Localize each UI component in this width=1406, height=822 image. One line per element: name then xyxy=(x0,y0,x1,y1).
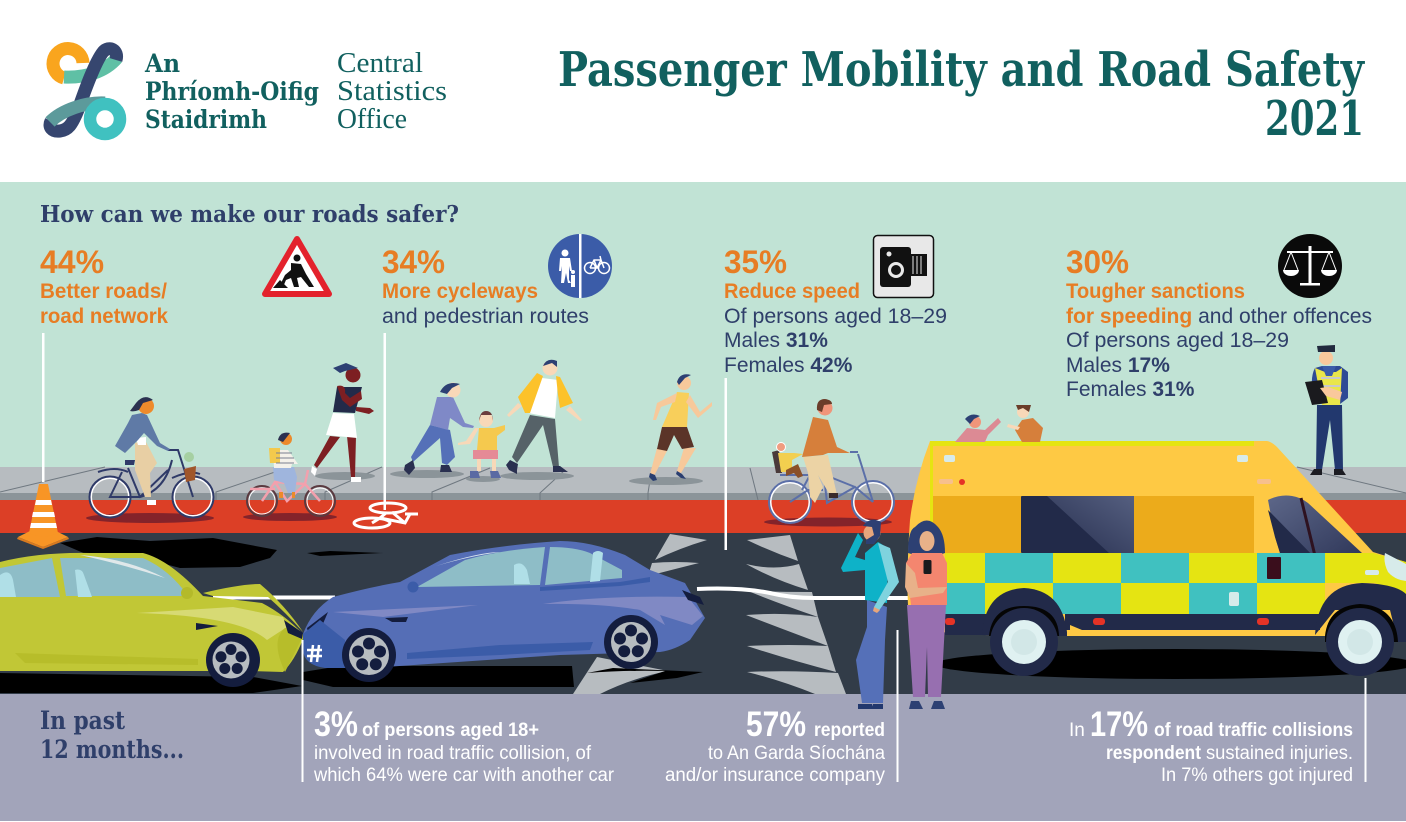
title: 2021 xyxy=(1265,91,1364,147)
stat: 30% tougher sanctions: Tougher sanctions xyxy=(1066,280,1245,303)
icon: speed camera sign xyxy=(874,236,934,298)
stat: 34% more cycleways: More cycleways xyxy=(382,280,538,303)
logo text: English name: Central xyxy=(337,47,423,79)
stat: 57% reported: 57% xyxy=(746,705,806,744)
stat: 35% reduce speed: Reduce speed xyxy=(724,280,860,303)
stat: 44% better roads: 44% xyxy=(40,244,104,280)
stat: 44% better roads: Better roads/ xyxy=(40,280,167,303)
stat: 35% reduce speed xyxy=(724,244,947,377)
stat: 30% tougher sanctions: Males 17% xyxy=(1066,354,1170,377)
car: yellow-green xyxy=(0,553,303,687)
stat: 17% injuries: respondent xyxy=(1106,743,1202,764)
title xyxy=(558,42,1366,147)
car: blue xyxy=(303,541,705,682)
person: cyclist with child seat xyxy=(764,399,894,526)
stat: 3% involved in collision xyxy=(313,705,615,786)
logo text: English name: Statistics xyxy=(337,75,447,107)
stat: 3% involved in collision: involved in road traffic collision, of xyxy=(314,743,592,764)
stat: 34% more cycleways xyxy=(382,244,589,328)
stat: 34% more cycleways: and pedestrian routes xyxy=(382,305,589,328)
stat: 35% reduce speed: Of persons aged 18–29 xyxy=(724,305,947,328)
stat: 57% reported: reported xyxy=(814,720,885,741)
cone xyxy=(17,484,69,549)
heading: in past 12 months: 12 months... xyxy=(40,735,184,764)
person: male runner xyxy=(629,374,712,485)
person: man in yellow jacket xyxy=(500,360,582,480)
logo text: Irish name: Phríomh-Oifig xyxy=(145,77,319,106)
person: child on pink bike xyxy=(243,433,337,521)
leader lines xyxy=(42,333,1366,782)
person: woman in purple top xyxy=(390,382,474,478)
cycle lane symbol xyxy=(354,503,418,528)
person: cyclist with basket xyxy=(86,397,214,523)
stat: 17% injuries: of road traffic collisions xyxy=(1154,720,1353,741)
logo text: Irish name xyxy=(144,49,319,134)
stat: 57% reported xyxy=(665,705,885,786)
crash shadows xyxy=(0,537,703,693)
logo text: English name: Office xyxy=(337,103,407,135)
stat: 57% reported: to An Garda Síochána xyxy=(708,743,885,764)
van: ambulance xyxy=(908,441,1406,679)
stat: 35% reduce speed: Females 42% xyxy=(724,354,853,377)
stat: 35% reduce speed: 35% xyxy=(724,244,787,280)
road markings: crossing xyxy=(573,534,846,694)
stat: 57% reported: and/or insurance company xyxy=(665,765,885,786)
stat: 44% better roads xyxy=(40,244,168,328)
person: woman jogging xyxy=(311,363,375,482)
stat: 17% injuries: 17% xyxy=(1090,705,1148,744)
stat: 44% better roads: road network xyxy=(40,305,168,328)
stat: 30% tougher sanctions: for speeding and other offences xyxy=(1066,305,1372,328)
person: child on skates xyxy=(458,411,505,482)
stat: 17% injuries xyxy=(1069,705,1353,786)
person: man on phone xyxy=(841,520,899,709)
icon: road works sign xyxy=(265,239,329,294)
heading: in past 12 months: In past xyxy=(40,706,125,735)
logo: CSO symbol xyxy=(50,49,120,134)
stat: 3% involved in collision: which 64% were car with another car xyxy=(313,765,615,786)
lane line xyxy=(213,588,912,598)
logo text: Irish name: Staidrimh xyxy=(145,105,267,134)
stat: 30% tougher sanctions: Of persons aged 18–29 xyxy=(1066,329,1289,352)
icon: cycle and pedestrian sign xyxy=(548,234,612,298)
stat: 30% tougher sanctions xyxy=(1066,244,1372,401)
stat: 17% injuries: In xyxy=(1069,720,1085,741)
heading: in past 12 months xyxy=(40,706,184,764)
logo text: English name xyxy=(337,47,447,135)
stat: 17% injuries: In 7% others got injured xyxy=(1161,765,1353,786)
stat: 3% involved in collision: 3% xyxy=(314,705,358,744)
logo text: Irish name: An xyxy=(144,49,180,78)
stat: 34% more cycleways: 34% xyxy=(382,244,445,280)
person: woman with smartphone xyxy=(905,520,947,709)
stat: 30% tougher sanctions: Females 31% xyxy=(1066,378,1195,401)
stat: 3% involved in collision: of persons aged 18+ xyxy=(362,720,539,741)
stat: 17% injuries: sustained injuries. xyxy=(1206,743,1353,764)
stat: 35% reduce speed: Males 31% xyxy=(724,329,828,352)
stat: 30% tougher sanctions: 30% xyxy=(1066,244,1129,280)
heading: how can we make our roads safer: How can we make our roads safer? xyxy=(40,201,459,228)
panel: scene background xyxy=(0,182,1406,821)
icon: scales of justice xyxy=(1278,234,1342,298)
person: police officer xyxy=(1305,345,1348,475)
people: two children in ambulance window xyxy=(955,405,1043,442)
